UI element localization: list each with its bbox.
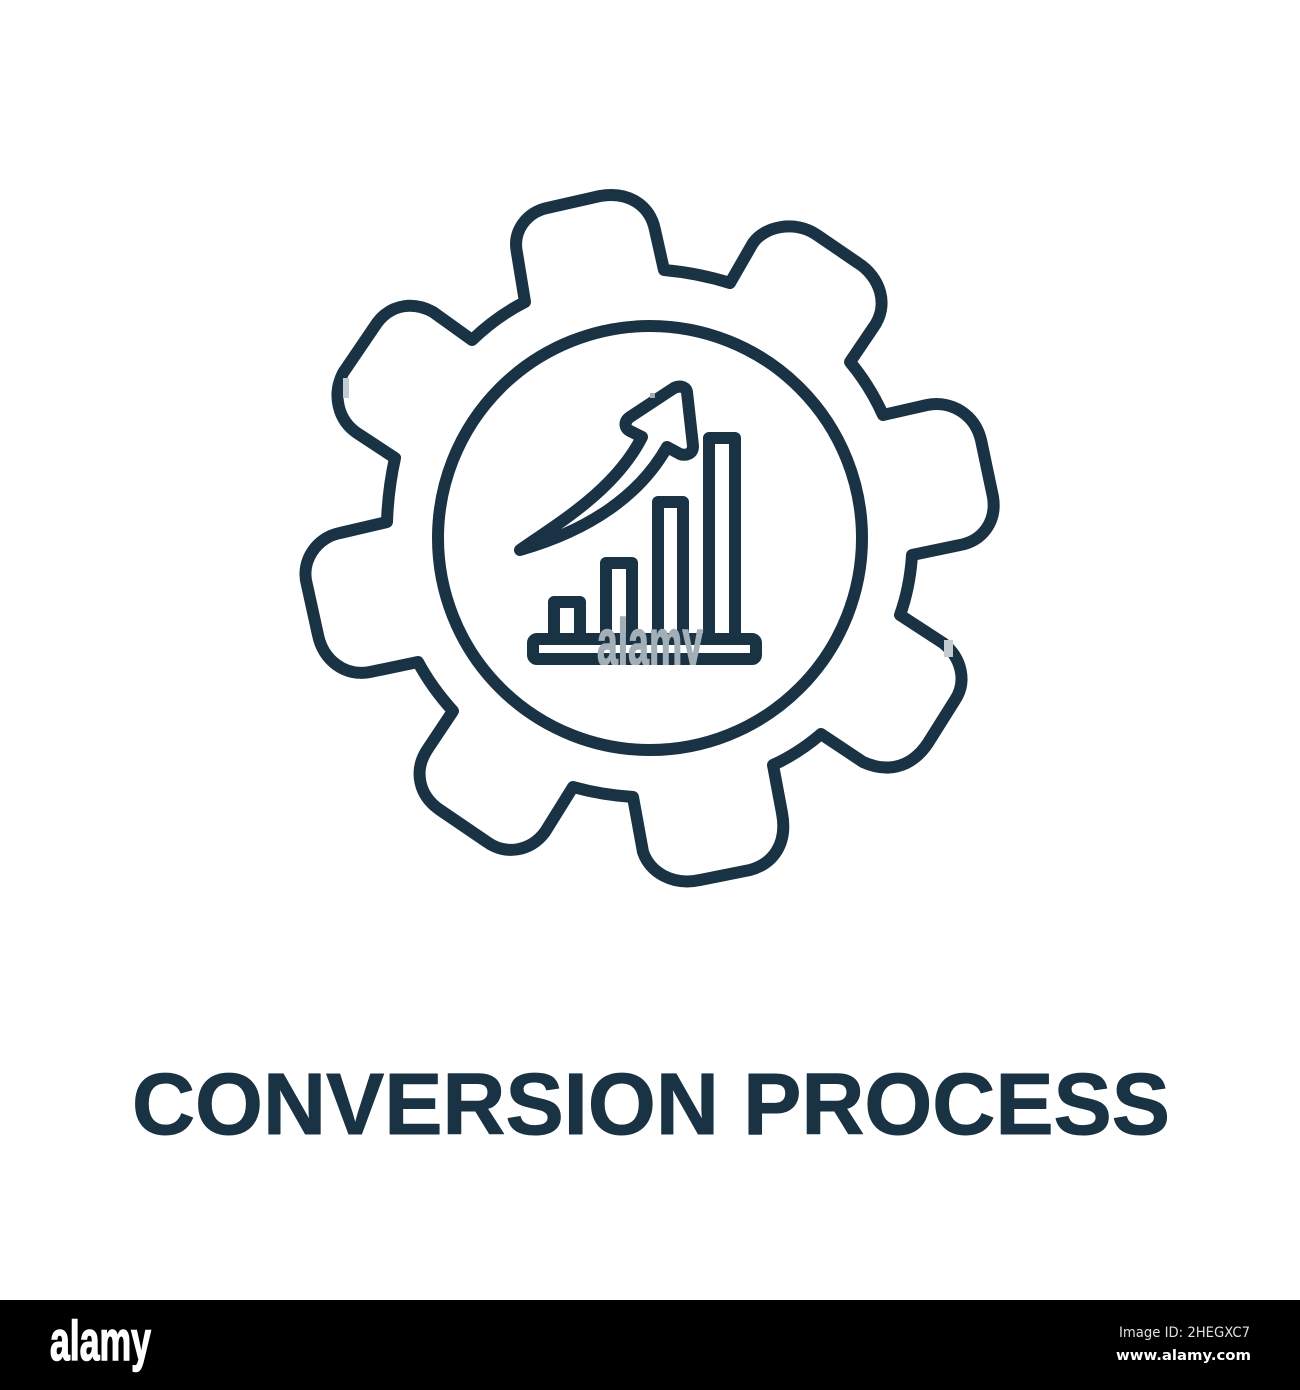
bar 1 [554, 602, 580, 636]
bar 2 [606, 563, 632, 636]
icon: gear outline [305, 195, 994, 881]
title: CONVERSION PROCESS [132, 1056, 1170, 1153]
watermark: alamy [597, 605, 703, 679]
icon: inner circle [438, 326, 862, 750]
bar 4 [709, 438, 735, 636]
image id: Image ID: 2HEGXC7 [1119, 1325, 1250, 1341]
bar chart icon [533, 438, 756, 659]
bar 3 [658, 502, 683, 636]
footer bar [0, 1300, 1300, 1390]
icon: growth arrow [520, 387, 693, 550]
footer logo: alamy [50, 1309, 151, 1372]
website: www.alamy.com [1116, 1348, 1251, 1364]
chart base [533, 639, 756, 659]
